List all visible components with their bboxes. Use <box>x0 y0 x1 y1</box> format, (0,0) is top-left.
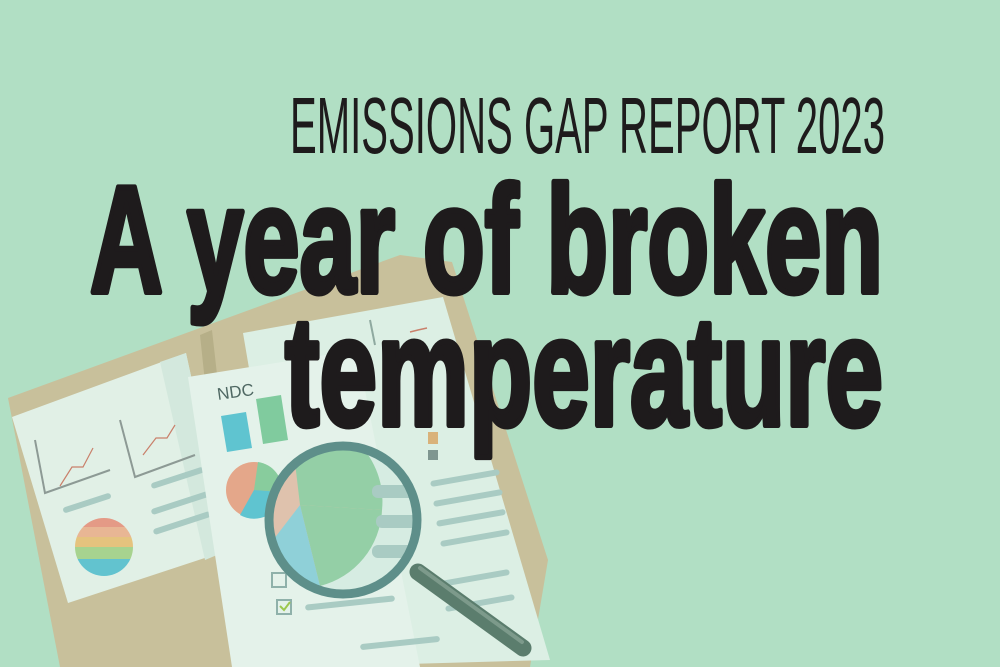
NDC label: NDC <box>216 380 255 404</box>
headline <box>90 155 883 458</box>
rainbow pie <box>75 518 133 576</box>
pie chart <box>226 462 282 519</box>
bar chart <box>221 395 288 452</box>
paper: NDC report <box>188 350 440 667</box>
illustration: folder with reports <box>8 255 550 667</box>
folder back <box>8 255 548 667</box>
icon: magnifying glass <box>264 442 532 656</box>
paper: left report <box>12 353 229 603</box>
paper: right back report <box>243 297 550 667</box>
